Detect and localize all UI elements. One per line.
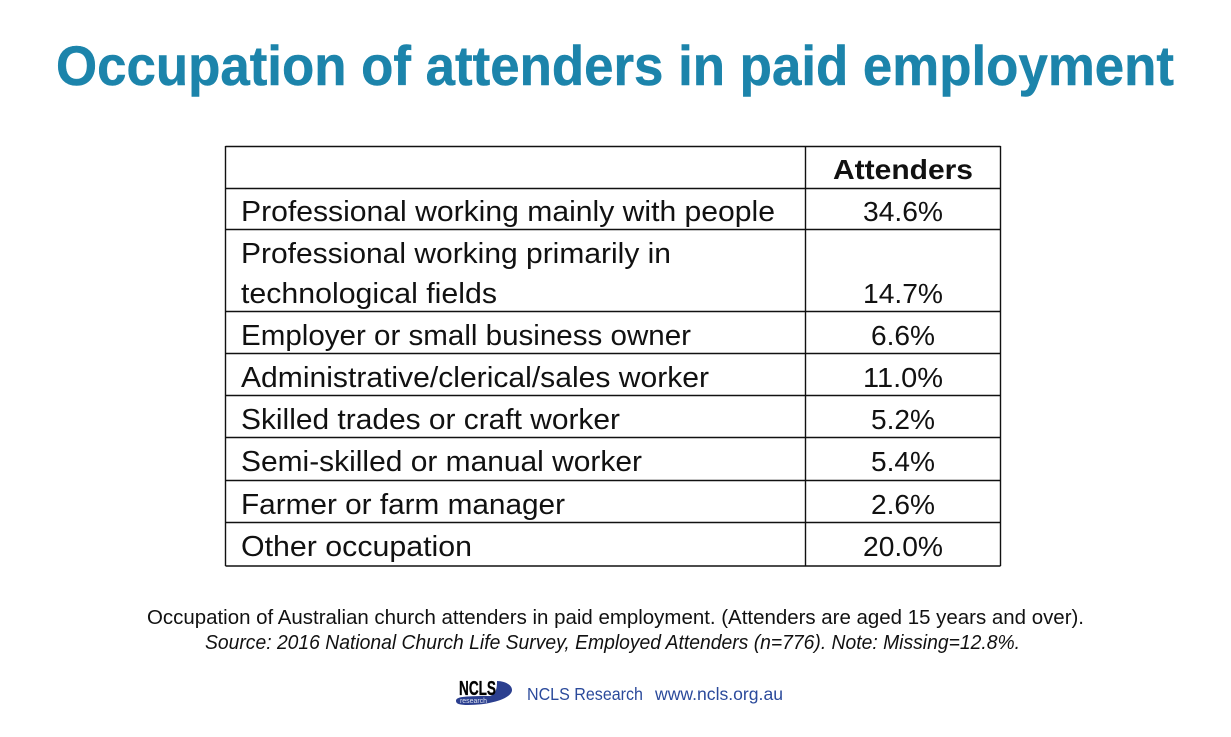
row: Skilled trades or craft worker: Skilled trades or craft worker <box>241 404 620 436</box>
row: Administrative/clerical/sales worker: 11.0% <box>863 362 943 393</box>
row: Professional working primarily in technological fields: Professional working primarily in <box>241 238 671 270</box>
row: Farmer or farm manager: 2.6% <box>871 489 935 520</box>
row: Other occupation <box>241 531 943 563</box>
logo: NCLS research: NCLS <box>459 678 496 700</box>
source note: Source: 2016 National Church Life Survey, Employed Attenders (n=776). Note: Missing=12.8%. <box>205 632 1020 654</box>
row: Professional working primarily in technological fields: 14.7% <box>863 278 943 309</box>
row: Skilled trades or craft worker: 5.2% <box>871 404 935 435</box>
footer: NCLS Research: NCLS Research <box>527 684 643 704</box>
row: Semi-skilled or manual worker: 5.4% <box>871 446 935 477</box>
row: Farmer or farm manager <box>241 489 935 521</box>
row: Professional working primarily in technological fields <box>241 238 943 310</box>
row: Professional working primarily in technological fields: technological fields <box>241 278 497 310</box>
table header: Attenders: Attenders <box>833 154 973 185</box>
row: Semi-skilled or manual worker: Semi-skilled or manual worker <box>241 446 642 478</box>
row: Employer or small business owner: Employer or small business owner <box>241 320 691 352</box>
row: Administrative/clerical/sales worker: Administrative/clerical/sales worker <box>241 362 709 394</box>
table <box>226 146 1000 566</box>
row: Administrative/clerical/sales worker <box>241 362 943 394</box>
row: Professional working mainly with people: Professional working mainly with people <box>241 196 775 228</box>
row: Farmer or farm manager: Farmer or farm manager <box>241 489 565 521</box>
logo: NCLS research: research <box>460 698 487 705</box>
row: Employer or small business owner <box>241 320 935 352</box>
row: Other occupation: 20.0% <box>863 531 943 562</box>
row: Semi-skilled or manual worker <box>241 446 935 478</box>
caption: Occupation of Australian church attenders in paid employment. (Attenders are aged 15 years and over). <box>147 607 1084 629</box>
row: Professional working mainly with people: 34.6% <box>863 196 943 227</box>
row: Other occupation: Other occupation <box>241 531 472 563</box>
row: Employer or small business owner: 6.6% <box>871 320 935 351</box>
title: Occupation of attenders in paid employment <box>56 34 1174 97</box>
footer: website: www.ncls.org.au <box>654 684 783 704</box>
row: Skilled trades or craft worker <box>241 404 935 436</box>
